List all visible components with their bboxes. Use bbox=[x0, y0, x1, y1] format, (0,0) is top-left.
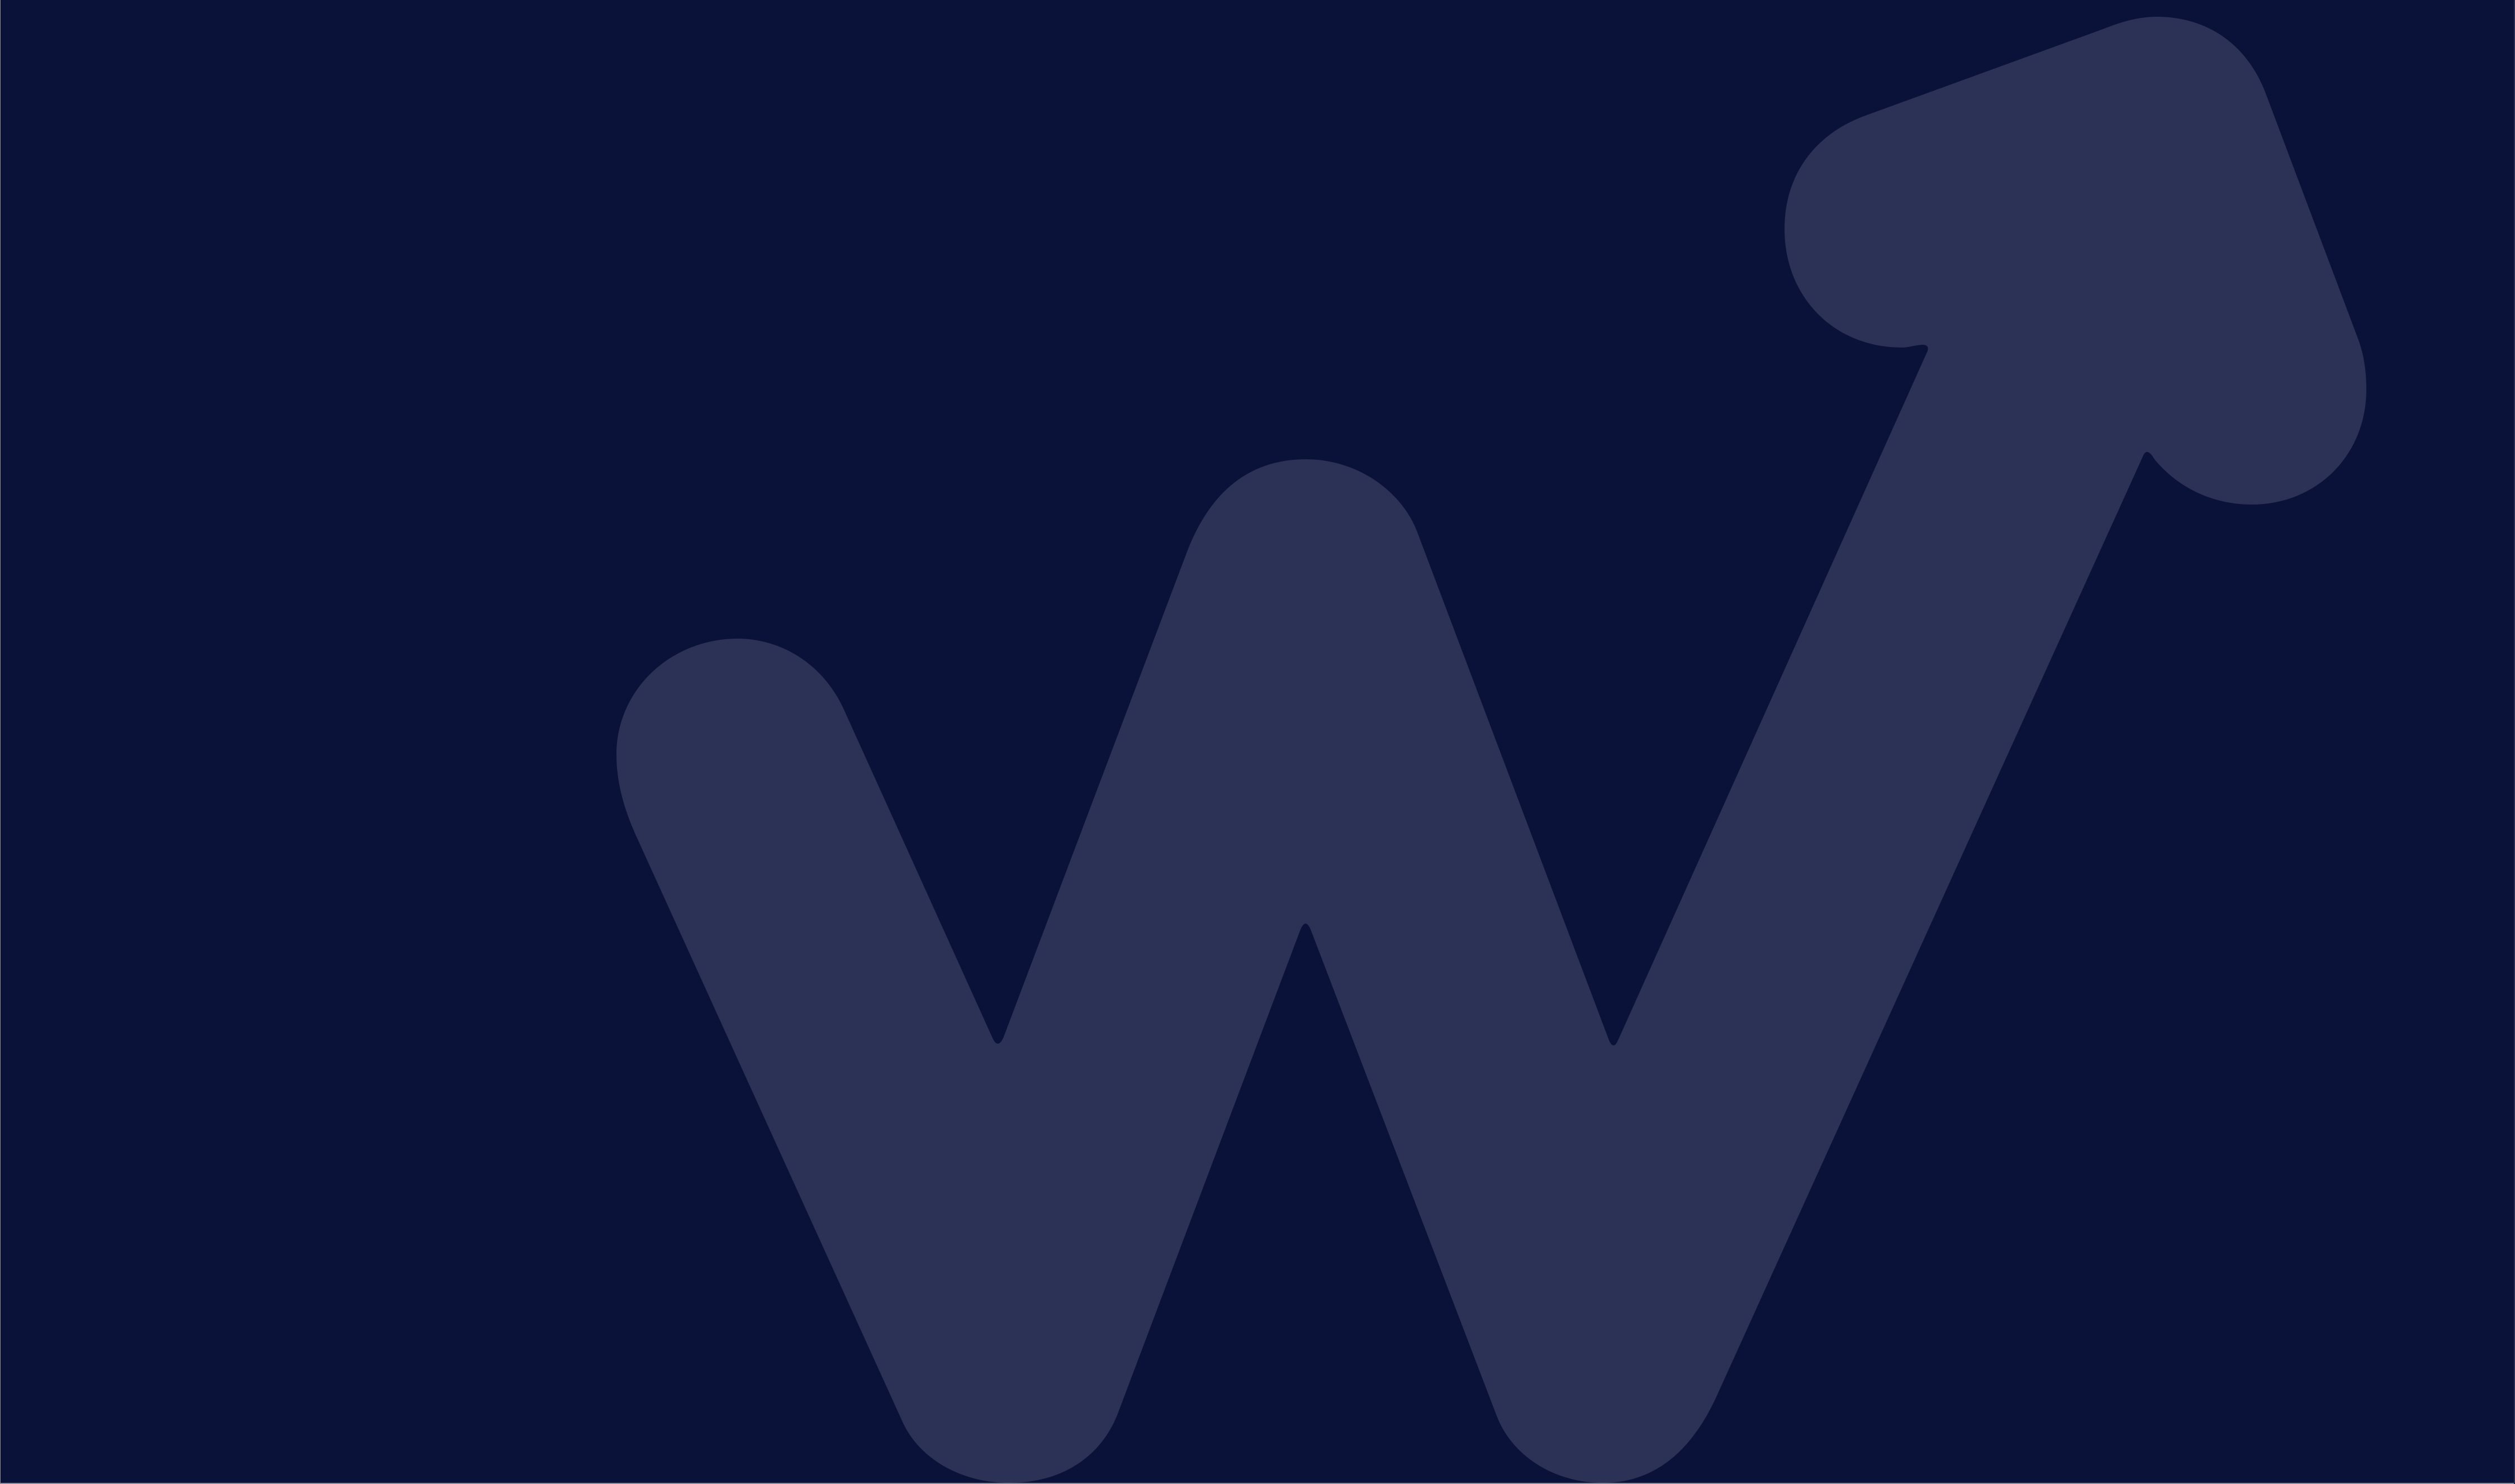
icon: W-shaped zigzag arrow rising to upper right bbox=[616, 17, 2366, 1483]
